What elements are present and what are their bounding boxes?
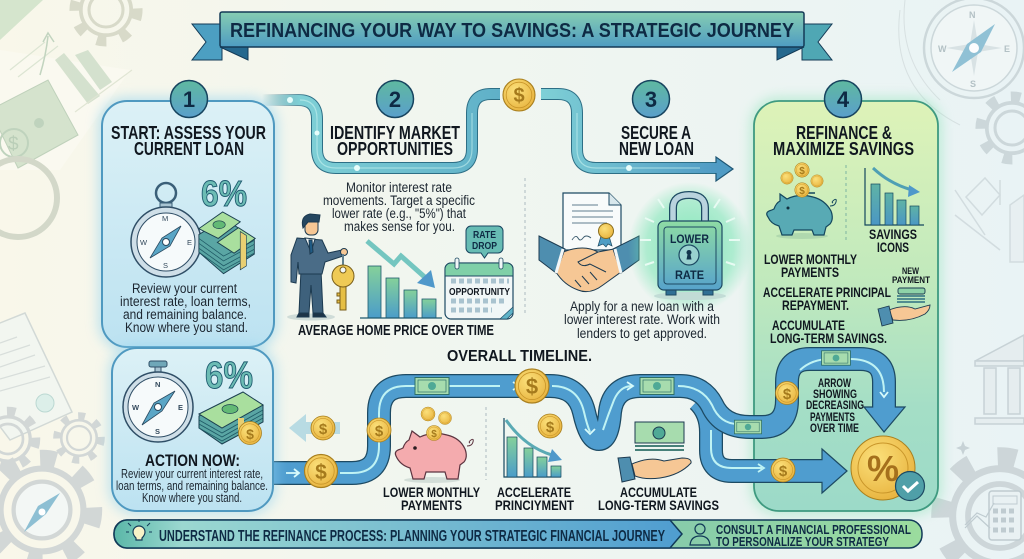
coin: rise [367,418,391,442]
icon: loan document [563,193,621,250]
text: savings icons: ICONS [877,239,909,255]
step number 3 [632,80,670,118]
chart: falling bars with arrow [360,241,442,318]
section: step 2 identify market opportunities: IDENTIFY MARKET [330,123,460,143]
icon: key [332,254,354,310]
icon: compass: S [163,261,168,270]
icon: opportunity calendar: OPPORTUNITY [449,287,510,298]
coin: top path [503,79,535,111]
chart: accelerate bars [504,418,562,477]
coin: panel 4 path [776,382,798,404]
icon: compass: M [162,214,168,223]
labels: lower timeline: ACCUMULATE [620,484,697,500]
text: step 1 body: interest rate, loan terms, [120,294,251,309]
background decoration: top-right compass: N [969,10,976,20]
divider [845,165,847,240]
text: accumulate long-term savings: ACCUMULATE [772,317,845,333]
arrow: timeline path branch to percent coin [698,400,847,493]
heading: step 4: REFINANCE & [796,123,892,143]
icon: stopwatch compass: N [155,380,160,389]
step number 1: 1 [183,87,195,112]
text: arrow showing decreasing payments: SHOWING [813,389,857,401]
icon: compass [131,183,201,277]
coin: branch [771,458,795,482]
coin: near accelerate chart: $ [546,419,555,436]
text: consult [716,523,911,549]
background decoration: top-right compass: E [1004,44,1010,54]
text: accelerate principal repayment: ACCELERATE PRINCIPAL [763,284,891,300]
labels: lower timeline: PAYMENTS [401,497,462,513]
text: action now body: Know where you stand. [142,491,242,505]
text: step 1 body: Know where you stand. [125,320,248,335]
icon: lower rate lock: LOWER [670,232,709,246]
icon: lower rate lock: RATE [675,268,704,282]
heading: step 4 [773,123,914,159]
text: accelerate principal repayment [763,284,891,313]
icon: stopwatch compass: E [178,403,183,412]
text: action now body [116,467,268,505]
bottom banner [114,519,922,549]
coin: faded arrow: $ [319,421,328,438]
section: step 3 secure a new loan [525,123,752,341]
section: step 3 secure a new loan: NEW LOAN [619,139,694,159]
labels: lower timeline: ACCELERATE [497,484,571,500]
icon: rate drop bubble: RATE [473,229,496,241]
icon: cash stack [199,212,255,274]
icon: hand holding payment [878,288,930,326]
divider [524,178,526,315]
coin: branch: $ [779,463,788,480]
icon: percent coin with check [851,436,924,500]
text: new payment: NEW [902,266,919,277]
label: average home price: AVERAGE HOME PRICE OVER TIME [298,323,494,339]
icon: stopwatch compass [123,361,193,442]
background decoration: top-left finance sketch [0,0,137,237]
arrow: faded left arrow [289,414,340,442]
labels: lower timeline: LONG-TERM SAVINGS [598,497,719,513]
coin: start of timeline: $ [315,461,327,484]
section: step 2 identify market opportunities: OPPORTUNITIES [337,139,453,159]
background decoration: bottom-right gear and calculator [942,458,1024,559]
text: accumulate long-term savings: LONG-TERM SAVINGS. [770,330,887,346]
bottom banner: UNDERSTAND THE REFINANCE PROCESS: PLANNING YOUR STRATEGIC FINANCIAL JOURNEY [159,528,665,545]
text: accumulate long-term savings [770,317,887,346]
text: action now body: loan terms, and remaining balance. [116,479,268,493]
text: step 2 body [323,180,475,234]
icon: advisor [690,524,710,545]
heading: step 4: MAXIMIZE SAVINGS [773,139,914,159]
divider [485,407,487,480]
text: step 3 body: lower interest rate. Work with [564,312,720,327]
icon: opportunity calendar [445,258,513,319]
icon: pink piggy bank: $ [431,429,437,440]
text: new payment: PAYMENT [892,275,930,286]
text: lower monthly payments: PAYMENTS [781,264,839,280]
icon: pink piggy bank [395,407,473,483]
text: arrow showing decreasing payments [806,378,864,435]
text: lower monthly payments: LOWER MONTHLY [764,251,857,267]
labels: lower timeline [383,484,719,513]
background decoration: top-right compass [899,0,1024,159]
chart: savings bars [865,168,924,225]
text: savings icons [869,226,917,255]
background decoration: right side sketches and bank [955,178,1024,455]
text: savings icons: SAVINGS [869,226,917,242]
step number 1 [170,80,208,118]
text: lower monthly payments [764,251,857,280]
heading: step 1: CURRENT LOAN [134,139,244,159]
text: action now body: Review your current interest rate, [121,467,263,481]
icon: cash stack with coin: $ [246,426,254,442]
coin: upper timeline: $ [526,374,538,399]
heading: step 1 [111,123,266,159]
icon: compass: W [140,238,148,247]
coin: start of timeline [304,454,338,488]
panel: step 1 assess current loan [98,97,278,351]
title banner: REFINANCING YOUR WAY TO SAVINGS: A STRATEGIC JOURNEY [230,19,794,42]
icon: light bulb [126,519,152,540]
icon: stopwatch compass: W [132,403,140,412]
background decoration: top-left finance sketch: $ [8,134,19,155]
step number 4: 4 [837,87,850,112]
timeline heading: OVERALL TIMELINE. [447,348,592,365]
icon: blue piggy bank with coins: $ [799,166,805,177]
section: step 3 secure a new loan: SECURE A [621,123,691,143]
title banner [192,12,832,60]
text: step 2 body: lower rate (e.g., "5%") that [332,206,466,221]
text: arrow showing decreasing payments: OVER TIME [810,423,859,435]
icon: businessman [287,214,348,320]
text: consult: CONSULT A FINANCIAL PROFESSIONAL [716,523,911,537]
arrow: main timeline path [273,359,905,477]
coin: near accelerate chart [538,414,562,438]
panel: step 4 refinance and maximize savings [750,97,942,515]
text: step 2 body: movements. Target a specific [323,193,475,208]
icon: 6 percent: 6% [205,355,253,397]
step number 3: 3 [645,87,657,112]
arrow: top path from coin to step 4 [541,94,733,181]
text: step 1 body [120,281,251,335]
text: arrow showing decreasing payments: ARROW [818,378,851,390]
text: accelerate principal repayment: REPAYMENT. [782,297,849,313]
bills on timeline [415,351,850,434]
text: step 3 body: Apply for a new loan with a [570,299,714,314]
labels: lower timeline: PRINCIYMENT [495,497,574,513]
heading: step 1: START: ASSESS YOUR [111,123,266,143]
icon: 6 percent: 6% [201,173,247,214]
text: arrow showing decreasing payments: PAYMENTS [810,412,855,424]
icon: rate drop bubble [466,226,503,258]
step number 4 [824,80,862,118]
section: step 2 identify market opportunities [287,123,513,339]
text: step 3 body: lenders to get approved. [577,326,707,341]
icon: handshake [539,236,639,292]
icon: lower rate lock [628,182,752,314]
labels: lower timeline: LOWER MONTHLY [383,484,481,500]
text: step 1 body: and remaining balance. [123,307,247,322]
coin: faded arrow [311,416,335,440]
background decoration: top-right compass: W [938,44,947,54]
step number 2 [376,80,414,118]
coin: panel 4 path: $ [783,386,792,403]
icon: blue piggy bank with coins: $ [799,186,805,197]
text: step 2 body: makes sense for you. [344,219,455,234]
step number 2: 2 [389,87,401,112]
icon: rate drop bubble: DROP [472,240,497,252]
text: step 2 body: Monitor interest rate [346,180,452,195]
background decoration: top-right compass: S [970,79,976,89]
icon: stopwatch compass: S [155,427,160,436]
heading: action now: ACTION NOW: [145,451,240,470]
icon: percent coin with check: % [867,448,899,489]
icon: hand holding cash [618,422,691,482]
icon: blue piggy bank with coins [767,163,836,239]
icon: compass: E [187,238,192,247]
panel: action now [108,344,277,515]
coin: top path: $ [513,85,525,107]
coin: rise: $ [375,423,384,440]
text: step 1 body: Review your current [132,281,237,296]
icon: cash stack with coin [199,392,263,444]
text: arrow showing decreasing payments: DECREASING [806,400,864,412]
text: new payment [892,266,930,286]
background decoration: bottom-left document and gears [0,313,101,559]
text: step 3 body [564,299,720,341]
arrow: top path from step 1 to step 2 coin [262,94,500,171]
coin: upper timeline [515,369,549,403]
text: consult: TO PERSONALIZE YOUR STRATEGY [716,535,890,549]
